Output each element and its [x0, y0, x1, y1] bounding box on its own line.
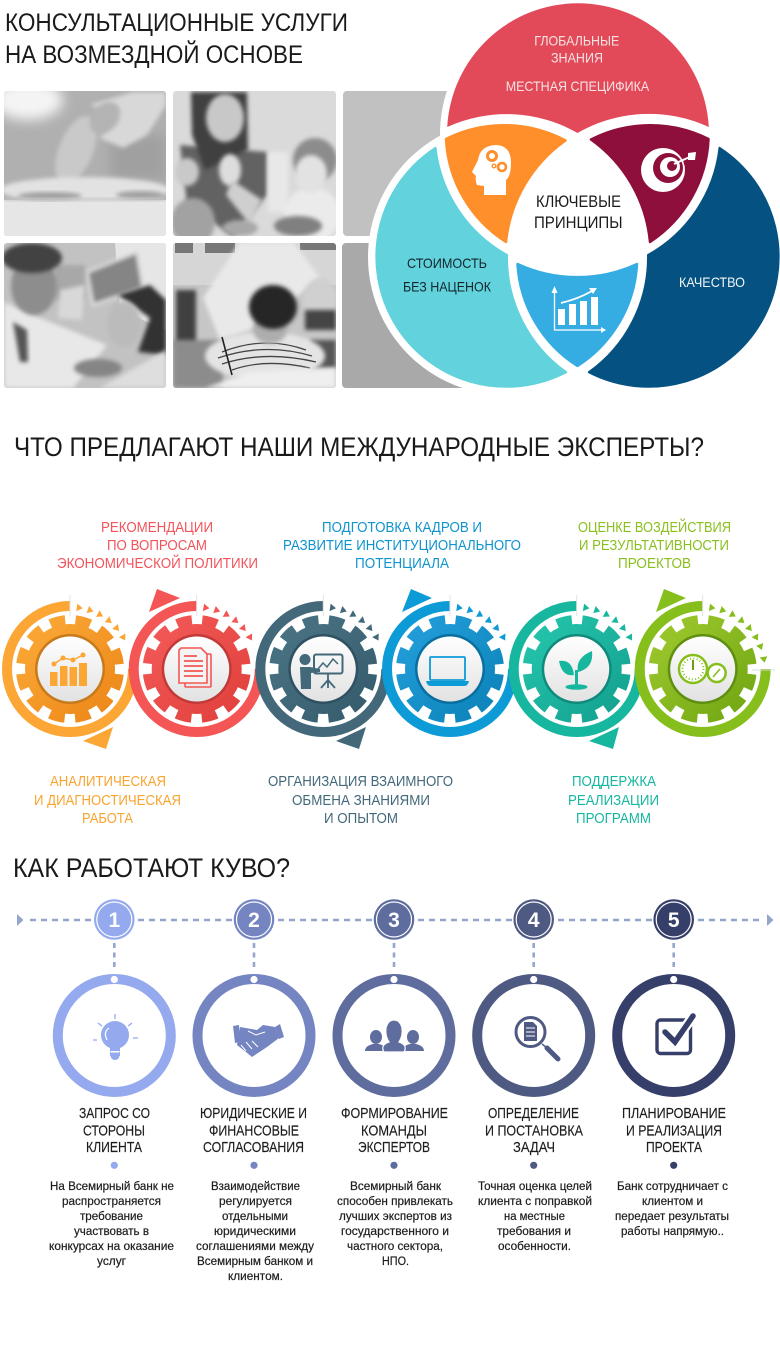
label: programme support — [568, 773, 659, 827]
number badge 3 — [374, 899, 414, 940]
step heading — [341, 1106, 448, 1156]
label: global knowledge — [506, 33, 650, 94]
photo: doctor and patient — [2, 243, 166, 388]
icon: laptop — [426, 657, 469, 686]
number badge 3: 3 — [388, 909, 400, 932]
label: global knowledge: ГЛОБАЛЬНЫЕ — [534, 33, 619, 49]
label: cost without markups: СТОИМОСТЬ — [407, 255, 487, 271]
title: КОНСУЛЬТАЦИОННЫЕ УСЛУГИ — [5, 9, 348, 37]
label: analytics: И ДИАГНОСТИЧЕСКАЯ — [34, 792, 181, 809]
number badge 4 — [513, 899, 554, 940]
label: impact evaluation: ОЦЕНКЕ ВОЗДЕЙСТВИЯ — [578, 518, 731, 536]
label: impact evaluation: И РЕЗУЛЬТАТИВНОСТИ — [579, 537, 729, 554]
photo: hands pouring grain — [4, 91, 166, 236]
label: training and capacity — [283, 519, 521, 572]
step heading: ПРОЕКТА — [646, 1140, 702, 1156]
gear: programme support — [514, 595, 640, 749]
number badge 5: 5 — [668, 909, 680, 932]
step text: Взаимодействие — [211, 1181, 300, 1193]
step 1 — [49, 899, 174, 1268]
icon: rising bar chart — [552, 286, 606, 333]
segment: blue — [518, 264, 637, 366]
label: programme support: РЕАЛИЗАЦИИ — [568, 792, 659, 809]
timeline connector — [17, 914, 774, 970]
step 4 — [477, 899, 592, 1253]
step text: особенности. — [498, 1241, 571, 1253]
step text: услуг — [97, 1256, 126, 1268]
label: programme support: ПРОГРАММ — [576, 810, 651, 827]
step text: юридическими — [214, 1226, 296, 1238]
icon: presenter at board — [300, 654, 342, 689]
title: НА ВОЗМЕЗДНОЙ ОСНОВЕ — [5, 39, 303, 69]
diagram: key principles — [368, 0, 779, 395]
number badge 1 — [94, 899, 135, 940]
label: analytics: АНАЛИТИЧЕСКАЯ — [50, 773, 166, 790]
step 3 — [337, 899, 453, 1268]
label: knowledge exchange: ОБМЕНА ЗНАНИЯМИ — [292, 792, 430, 809]
step text: Всемирным банком и — [197, 1256, 313, 1268]
step text — [196, 1181, 314, 1283]
step text: Банк сотрудничает с — [617, 1181, 728, 1193]
step text: участвовать в — [74, 1226, 149, 1238]
heading: how it works: КАК РАБОТАЮТ КУВО? — [13, 853, 290, 883]
number badge 1: 1 — [108, 909, 120, 932]
step heading: ЗАПРОС СО — [79, 1106, 150, 1122]
gear: knowledge exchange — [260, 595, 386, 749]
icon: bars with trend — [50, 652, 87, 686]
label: analytics: РАБОТА — [82, 810, 133, 827]
label: global knowledge: МЕСТНАЯ СПЕЦИФИКА — [506, 78, 650, 94]
segment: global knowledge — [447, 3, 709, 133]
segment: orange — [446, 125, 566, 242]
step text: передает результаты — [615, 1211, 729, 1223]
step text: конкурсах на оказание — [49, 1241, 174, 1253]
step text: клиента с поправкой — [478, 1196, 592, 1208]
label: key principles: ПРИНЦИПЫ — [534, 213, 622, 232]
label: training and capacity: РАЗВИТИЕ ИНСТИТУЦИОНАЛЬНОГО — [283, 537, 521, 554]
step 5 — [615, 899, 730, 1238]
ring with checkbox icon — [617, 976, 730, 1092]
icon: documents — [179, 648, 211, 687]
step text — [615, 1181, 729, 1238]
number badge 2 — [234, 899, 274, 940]
label: policy advice: ЭКОНОМИЧЕСКОЙ ПОЛИТИКИ — [57, 554, 258, 572]
step heading — [200, 1106, 307, 1156]
step heading — [79, 1106, 150, 1156]
segment: quality — [589, 148, 779, 387]
photo: boy writing in classroom — [173, 242, 337, 388]
label: analytics — [34, 773, 181, 827]
step text: на местные — [504, 1211, 565, 1223]
icon: head with gears — [472, 145, 511, 195]
step text: работы напрямую.. — [621, 1226, 724, 1238]
placeholder panels behind diagram — [342, 91, 472, 388]
step heading: ЗАДАЧ — [513, 1140, 555, 1156]
label: policy advice — [57, 519, 258, 572]
step text — [337, 1181, 453, 1268]
step heading: ФИНАНСОВЫЕ — [209, 1124, 299, 1140]
step heading: ЮРИДИЧЕСКИЕ И — [200, 1106, 307, 1122]
step text — [478, 1181, 592, 1253]
step heading: КОМАНДЫ — [361, 1124, 427, 1140]
step 2 — [196, 899, 314, 1283]
icon: gauges — [679, 655, 726, 683]
step text: способен привлекать — [337, 1196, 453, 1208]
step text: государственного и — [341, 1226, 449, 1238]
gear: impact evaluation — [640, 589, 775, 732]
step text: требование — [80, 1211, 143, 1223]
step heading: ПЛАНИРОВАНИЕ — [622, 1106, 726, 1122]
label: policy advice: ПО ВОПРОСАМ — [107, 537, 207, 554]
label: knowledge exchange: И ОПЫТОМ — [324, 810, 398, 827]
step heading — [485, 1106, 583, 1156]
label: impact evaluation: ПРОЕКТОВ — [618, 555, 691, 572]
number badge 4: 4 — [528, 909, 540, 932]
step heading: КЛИЕНТА — [86, 1140, 142, 1156]
label: knowledge exchange — [268, 773, 453, 827]
step heading: ОПРЕДЕЛЕНИЕ — [488, 1106, 579, 1122]
ring with bulb icon — [58, 976, 171, 1092]
label: training and capacity: ПОДГОТОВКА КАДРОВ И — [322, 519, 482, 536]
label: key principles: КЛЮЧЕВЫЕ — [536, 192, 621, 211]
step text: отдельными — [222, 1211, 288, 1223]
step heading: И ПОСТАНОВКА — [485, 1124, 583, 1140]
ring with team icon — [338, 976, 450, 1092]
number badge 5 — [653, 899, 694, 940]
step text: распространяется — [62, 1196, 161, 1208]
step heading: СТОРОНЫ — [83, 1124, 145, 1140]
gear: analytics — [7, 595, 133, 749]
heading: what experts offer: ЧТО ПРЕДЛАГАЮТ НАШИ МЕЖДУНАРОДНЫЕ ЭКСПЕРТЫ? — [14, 432, 704, 462]
step text: регулируется — [219, 1196, 292, 1208]
step heading: ФОРМИРОВАНИЕ — [341, 1106, 448, 1122]
step text: Точная оценка целей — [478, 1181, 592, 1193]
label: impact evaluation — [578, 518, 731, 572]
step heading: СОГЛАСОВАНИЯ — [203, 1140, 304, 1156]
gear: policy documents — [134, 589, 260, 732]
step heading: ЭКСПЕРТОВ — [358, 1140, 430, 1156]
icon: target with arrow — [641, 148, 696, 192]
title — [5, 9, 348, 69]
label: key principles — [534, 192, 622, 232]
ring with handshake icon — [198, 976, 310, 1092]
segment: cost — [376, 148, 566, 387]
step text: клиентом. — [228, 1271, 283, 1283]
step text: требования и — [497, 1226, 571, 1238]
step text: частного сектора, — [347, 1241, 443, 1253]
step text: Всемирный банк — [350, 1181, 442, 1193]
step text: соглашениями между — [196, 1241, 314, 1253]
photo: teacher and child — [171, 91, 340, 246]
label: cost without markups: БЕЗ НАЦЕНОК — [403, 279, 492, 295]
ring with magnifier icon — [477, 976, 590, 1092]
step text: На Всемирный банк не — [50, 1181, 174, 1193]
segment: maroon — [591, 125, 708, 242]
label: programme support: ПОДДЕРЖКА — [572, 773, 656, 790]
step heading: И РЕАЛИЗАЦИЯ — [626, 1124, 722, 1140]
label: training and capacity: ПОТЕНЦИАЛА — [355, 555, 449, 572]
label: policy advice: РЕКОМЕНДАЦИИ — [101, 519, 213, 536]
step heading — [622, 1106, 726, 1156]
label: global knowledge: ЗНАНИЯ — [551, 50, 603, 66]
step text: НПО. — [382, 1256, 409, 1268]
label: quality: КАЧЕСТВО — [679, 274, 745, 290]
gear: training — [387, 589, 513, 732]
label: knowledge exchange: ОРГАНИЗАЦИЯ ВЗАИМНОГО — [268, 773, 453, 790]
step text: клиентом и — [642, 1196, 703, 1208]
step text: лучших экспертов из — [339, 1211, 452, 1223]
number badge 2: 2 — [248, 909, 260, 932]
step text — [49, 1181, 174, 1268]
icon: sprout — [559, 651, 592, 690]
label: cost without markups — [403, 255, 492, 295]
